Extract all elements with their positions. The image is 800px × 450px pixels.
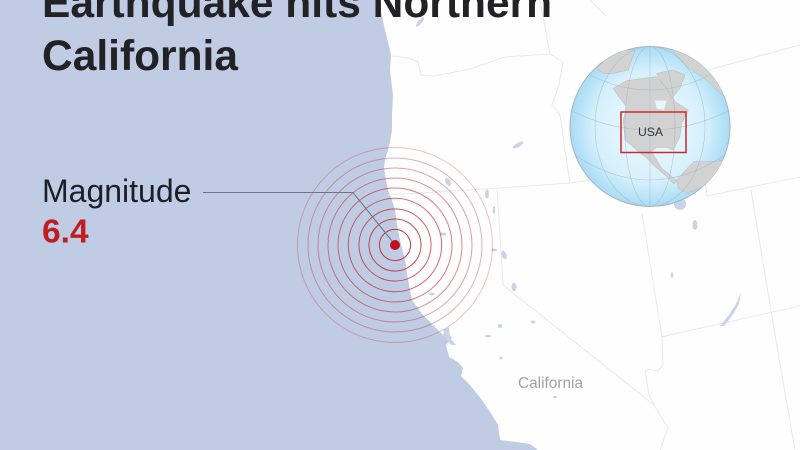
title: California: [42, 33, 238, 80]
map: state borders: [388, 0, 800, 450]
magnitude value: 6.4: [42, 214, 89, 250]
globe graticule: [570, 46, 730, 207]
map: state label California: California: [518, 375, 583, 392]
USA label: USA: [638, 125, 664, 139]
leader line: [203, 192, 392, 241]
earthquake rings: [298, 148, 492, 342]
globe ocean: [570, 46, 730, 206]
globe inset: [570, 46, 733, 207]
USA locator box: [621, 112, 686, 152]
globe land: [596, 50, 724, 194]
epicentre dot: [390, 240, 400, 250]
magnitude label: Magnitude: [42, 173, 191, 209]
map: lakes and rivers: [415, 16, 741, 398]
map: ocean: [0, 0, 538, 450]
